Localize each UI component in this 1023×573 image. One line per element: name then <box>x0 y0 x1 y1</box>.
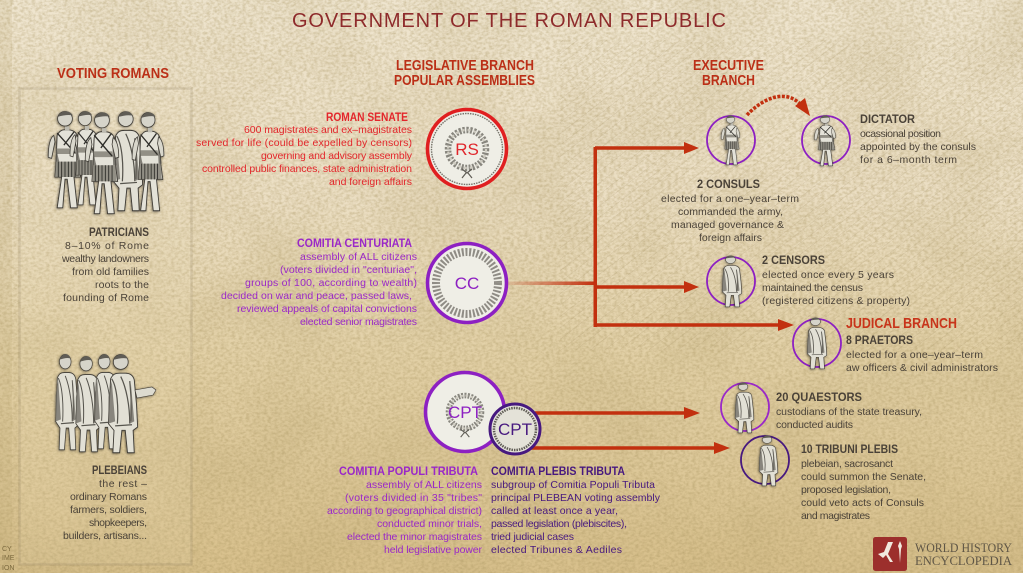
text: Comitia Plebis Tributa: passed legislation (plebiscites), <box>491 518 627 530</box>
text: tribuni: proposed legislation, <box>801 484 891 496</box>
text: consuls <box>661 179 799 244</box>
text: plebeians: ordinary Romans <box>70 491 147 503</box>
medallion: CC: CC <box>455 274 479 293</box>
text: Comitia Centuriata: elected senior magistrates <box>300 316 417 328</box>
text: patricians <box>61 227 149 304</box>
text: Comitia Populi Tributa: according to geographical district) <box>327 505 482 517</box>
icon: plebeians relief <box>56 354 156 453</box>
text: Comitia Centuriata: assembly of ALL citizens <box>300 251 417 263</box>
text: Roman Senate: 600 magistrates and ex–magistrates <box>244 124 412 136</box>
text: consuls: foreign affairs <box>699 232 762 244</box>
text: quaestors: custodians of the state treasury, <box>776 406 922 418</box>
text: Comitia Plebis Tributa: subgroup of Comitia Populi Tributa <box>491 479 655 491</box>
text: Comitia Centuriata: (voters divided in "centuriae", <box>280 264 417 276</box>
text: tribuni: and magistrates <box>801 510 870 522</box>
text: consuls: elected for a one–year–term <box>661 193 799 205</box>
text: tribuni: could veto acts of Consuls <box>801 497 924 509</box>
text: dictator <box>860 114 976 166</box>
text: Comitia Populi Tributa: assembly of ALL citizens <box>366 479 482 491</box>
text: tribuni <box>801 444 926 522</box>
text: patricians: founding of Rome <box>63 292 149 304</box>
text: tribuni: could summon the Senate, <box>801 471 926 483</box>
text: consuls: managed governance & <box>671 219 784 231</box>
text: Comitia Plebis Tributa: elected Tribunes & Aediles <box>491 544 622 556</box>
text: Comitia Centuriata: reviewed appeals of capital convictions <box>237 303 417 315</box>
panel: voting Romans <box>20 66 192 564</box>
text: patricians: wealthy landowners <box>61 253 149 265</box>
arrow to praetors <box>595 319 794 331</box>
medallion: CPT plebis <box>490 404 540 454</box>
heading: executive branch: BRANCH <box>702 73 755 89</box>
logo mark <box>873 537 907 571</box>
text: plebeians: the rest – <box>99 478 147 490</box>
text: plebeians: shopkeepers, <box>89 517 147 529</box>
text: quaestors: 20 QUAESTORS <box>776 392 862 404</box>
arrow to consuls <box>595 142 699 154</box>
logo: World History Encyclopedia <box>873 537 1012 571</box>
text: praetors <box>846 335 998 374</box>
text: Comitia Populi Tributa: elected the minor magistrates <box>347 531 482 543</box>
text: Roman Senate: ROMAN SENATE <box>326 112 408 124</box>
credit fragment: CY <box>2 546 12 553</box>
text: Comitia Plebis Tributa <box>491 466 661 556</box>
text: patricians: PATRICIANS <box>89 227 149 239</box>
heading: legislative branch: LEGISLATIVE BRANCH <box>396 58 534 74</box>
text: Comitia Plebis Tributa: tried judicial cases <box>491 531 574 543</box>
heading: legislative branch <box>394 58 535 89</box>
text: patricians: from old families <box>72 266 149 278</box>
text: censors: (registered citizens & property) <box>762 295 910 307</box>
text: consuls: commanded the army, <box>678 206 783 218</box>
text: dictator: for a 6–month term <box>860 154 957 166</box>
arrow to quaestors <box>535 407 700 419</box>
text: tribuni: plebeian, sacrosanct <box>801 458 893 470</box>
text: Comitia Populi Tributa: COMITIA POPULI TRIBUTA <box>339 466 478 478</box>
text: dictator: ocassional position <box>860 128 941 140</box>
text: plebeians: PLEBEIANS <box>92 465 147 477</box>
heading: legislative branch: POPULAR ASSEMBLIES <box>394 73 535 89</box>
medallion: CPT populi <box>426 372 504 452</box>
icon: censor <box>707 256 755 307</box>
text: Comitia Plebis Tributa: called at least once a year, <box>491 505 618 517</box>
vertical trunk <box>594 147 597 327</box>
arrow to tribuni <box>530 442 730 454</box>
text: tribuni: 10 TRIBUNI PLEBIS <box>801 444 898 456</box>
medallion: CPT populi: CPT <box>448 403 482 422</box>
arrow to censors <box>595 281 699 293</box>
text: consuls: 2 CONSULS <box>697 179 760 191</box>
text: Comitia Centuriata: decided on war and peace, passed laws, <box>221 290 412 302</box>
heading: judical branch: JUDICAL BRANCH <box>846 315 957 332</box>
icon: consul <box>707 116 755 165</box>
text: Comitia Populi Tributa <box>327 466 482 556</box>
text: quaestors <box>776 392 922 431</box>
text: Roman Senate: and foreign affairs <box>329 176 412 188</box>
arrows: executive connectors <box>508 142 794 454</box>
medallion: CPT plebis: CPT <box>498 420 532 439</box>
text: Comitia Populi Tributa: (voters divided in 35 "tribes" <box>345 492 482 504</box>
icon: praetor <box>793 318 841 369</box>
credit fragment <box>2 546 15 572</box>
text: praetors: 8 PRAETORS <box>846 335 913 347</box>
logo: World History Encyclopedia: ENCYCLOPEDIA <box>915 554 1012 568</box>
text: censors <box>762 255 910 307</box>
icon: tribune <box>741 436 789 486</box>
text: Comitia Plebis Tributa: principal PLEBEAN voting assembly <box>491 492 661 504</box>
credit fragment: IME <box>2 555 15 562</box>
heading: executive branch: EXECUTIVE <box>693 58 764 74</box>
text: censors: maintained the census <box>762 282 863 294</box>
logo wordmark: WORLD HISTORY <box>915 541 1012 555</box>
medallion: CC <box>428 244 506 322</box>
heading: executive branch <box>693 58 764 89</box>
text: Comitia Populi Tributa: conducted minor trials, <box>377 518 482 530</box>
text: censors: elected once every 5 years <box>762 269 894 281</box>
text: Comitia Centuriata: groups of 100, according to wealth) <box>245 277 417 289</box>
text: Comitia Populi Tributa: held legislative power <box>384 544 482 556</box>
text: Roman Senate <box>196 112 413 188</box>
medallion: RS <box>428 110 506 188</box>
text: censors: 2 CENSORS <box>762 255 825 267</box>
text: praetors: aw officers & civil administrators <box>846 362 998 374</box>
credit fragment: ION <box>2 565 14 572</box>
text: Roman Senate: served for life (could be expelled by censors) <box>196 137 412 149</box>
icon: quaestor <box>721 383 769 433</box>
arrow: dotted consul to dictator <box>747 96 810 116</box>
medallion: RS: RS <box>455 140 479 159</box>
text: Comitia Centuriata <box>221 238 417 328</box>
text: Comitia Plebis Tributa: COMITIA PLEBIS TRIBUTA <box>491 466 625 478</box>
text: patricians: roots to the <box>95 279 149 291</box>
title: GOVERNMENT OF THE ROMAN REPUBLIC <box>292 10 726 32</box>
text: dictator: DICTATOR <box>860 114 916 126</box>
text: Roman Senate: controlled public finances, state administration <box>202 163 412 175</box>
text: Comitia Centuriata: COMITIA CENTURIATA <box>297 238 412 250</box>
icon: dictator <box>802 116 850 166</box>
text: dictator: appointed by the consuls <box>860 141 976 153</box>
icon: patricians relief <box>48 111 164 214</box>
text: Roman Senate: governing and advisory assembly <box>261 150 413 162</box>
heading: voting Romans: VOTING ROMANS <box>57 66 169 82</box>
text: praetors: elected for a one–year–term <box>846 349 983 361</box>
connector stem from CC <box>508 282 595 285</box>
text: plebeians <box>63 465 147 542</box>
text: plebeians: farmers, soldiers, <box>70 504 147 516</box>
text: plebeians: builders, artisans... <box>63 530 147 542</box>
text: quaestors: conducted audits <box>776 419 853 431</box>
panel frame <box>20 88 192 564</box>
text: patricians: 8–10% of Rome <box>65 240 149 252</box>
